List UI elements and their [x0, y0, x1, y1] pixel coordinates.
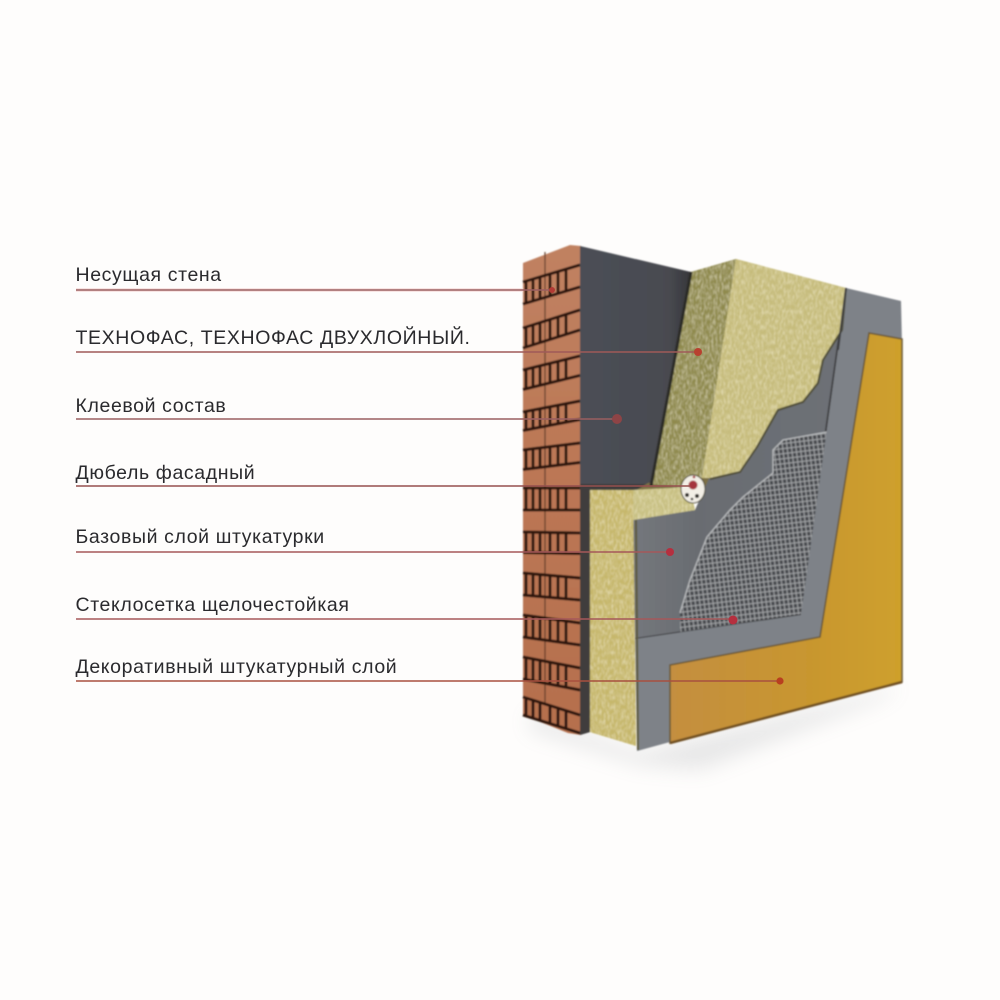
layer: glass mesh — [680, 432, 827, 632]
layer: lower mineral wool — [590, 487, 695, 750]
floor shadow — [530, 686, 902, 770]
callout: ТЕХНОФАС: ТЕХНОФАС, ТЕХНОФАС ДВУХЛОЙНЫЙ. — [76, 325, 471, 349]
layer: brick load-bearing wall — [523, 245, 581, 735]
callout: Несущая стена — [76, 264, 555, 293]
icon: facade dowel — [681, 475, 705, 503]
callout: Несущая стена: Несущая стена — [76, 264, 222, 286]
callout: Клеевой состав: Клеевой состав — [76, 395, 226, 417]
callout: Клеевой состав — [76, 395, 622, 424]
callout: Декоративный штукатурный слой — [76, 656, 784, 685]
layer: upper mineral wool — [651, 259, 846, 488]
wall cross-section — [523, 245, 902, 751]
callout: ТЕХНОФАС — [76, 325, 702, 356]
callout: Стеклосетка щелочестойкая — [76, 594, 738, 624]
callout: Стеклосетка щелочестойкая: Стеклосетка щелочестойкая — [76, 594, 350, 616]
callout: Декоративный штукатурный слой: Декоративный штукатурный слой — [76, 656, 397, 678]
callout: Базовый слой штукатурки: Базовый слой штукатурки — [76, 526, 325, 548]
layer: plaster outer strip — [635, 288, 902, 751]
layer: decorative finish — [670, 333, 902, 743]
layer: base plaster — [633, 288, 846, 639]
callout: Дюбель фасадный: Дюбель фасадный — [76, 462, 255, 484]
callout: Базовый слой штукатурки — [76, 526, 674, 556]
layer: adhesive — [580, 246, 712, 735]
